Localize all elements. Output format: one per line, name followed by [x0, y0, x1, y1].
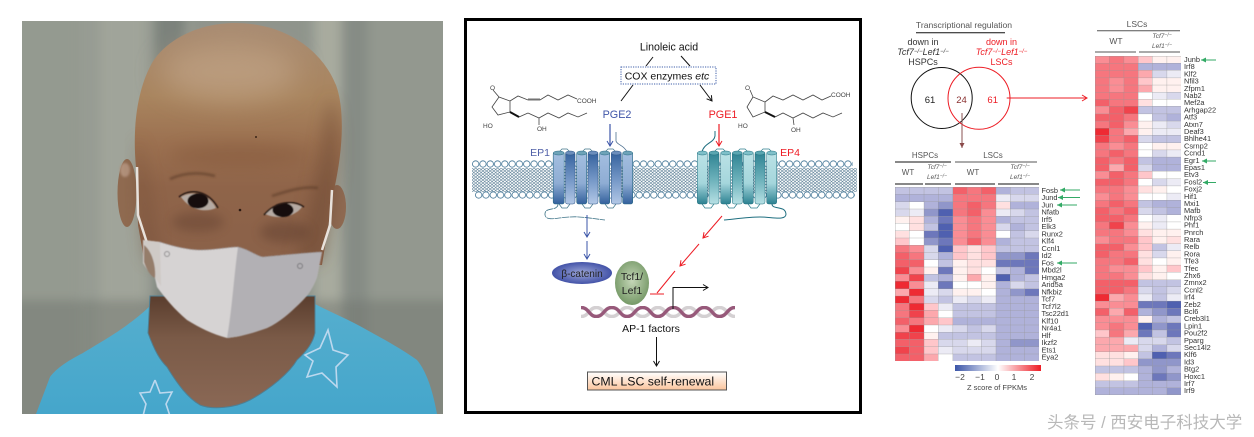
heatmap 2 gene labels: Ccnd1: [1184, 149, 1205, 158]
protein: Tcf1/Lef1: Lef1: [622, 285, 642, 297]
label: AP-1 factors: AP-1 factors: [622, 323, 680, 335]
heatmap 2 gene labels: Atxn7: [1184, 120, 1203, 129]
label: PGE2: PGE2: [603, 109, 631, 121]
heatmap 2 gene labels: Tfe3: [1184, 257, 1199, 266]
heatmap 2 gene labels: Etv3: [1184, 170, 1199, 179]
heatmap 2 gene labels: Nfil3: [1184, 77, 1199, 86]
venn diagram: [911, 67, 1010, 129]
heatmap 2 gene labels: Epas1: [1184, 163, 1205, 172]
arrow: PGE2 to EP1: [609, 124, 611, 146]
label: down in HSPCs: [897, 37, 949, 67]
heatmap 1 headers: −/−: [1023, 174, 1030, 180]
arrow: venn to shared heatmap: [961, 113, 963, 148]
heatmap 2 gene labels: Zhx6: [1184, 271, 1200, 280]
heatmap 1 gene labels: Runx2: [1042, 230, 1063, 238]
heatmap 2 gene labels: Egr1: [1184, 156, 1200, 165]
heatmap 2 gene labels: Hoxc1: [1184, 372, 1205, 381]
colour scale legend: 1: [1012, 372, 1017, 382]
heatmap 2 gene labels: Sec14l2: [1184, 343, 1211, 352]
heatmap 2: genes down in LSCs: [1095, 56, 1181, 395]
label: EP4: EP4: [780, 147, 800, 159]
protein: beta-catenin: [552, 262, 612, 284]
heatmap 1 gene labels: Tcf7l2: [1042, 302, 1061, 311]
heatmap 2 gene labels: Pparg: [1184, 336, 1204, 345]
venn diagram: 61: [925, 95, 935, 106]
heatmap 2 gene labels: Zmnx2: [1184, 278, 1207, 287]
heatmap 1 gene labels: Fosb: [1042, 186, 1058, 195]
heatmap 1 headers: Tcf7: [1010, 164, 1022, 171]
face mask: [143, 240, 322, 338]
eyebrows: [170, 173, 318, 196]
heatmap 1 headers: Lef1: [1010, 174, 1023, 181]
heatmap 1 headers: LSCs: [983, 151, 1003, 160]
heatmap 1 headers: Tcf7: [927, 164, 939, 171]
green arrows: heatmap 1 highlighted genes: [1057, 190, 1080, 263]
heatmap 2 gene labels: Rora: [1184, 249, 1201, 258]
label: down in HSPCs: −/−: [940, 49, 949, 55]
colour scale legend: −2: [955, 372, 965, 382]
chemical structure: PGE2: COOH: [577, 98, 597, 105]
heatmap 1 gene labels: Nr4a1: [1042, 324, 1062, 333]
arrows: to PGE2 and PGE1: [621, 85, 712, 101]
heatmap 1 headers: −/−: [939, 164, 947, 170]
chemical structure: PGE1: OH: [791, 127, 801, 134]
arrow: venn to LSC heatmap: [1007, 97, 1087, 99]
heatmap 2 headers: LSCs: [1127, 19, 1147, 29]
chemical structure: PGE1: COOH: [831, 92, 851, 99]
colour scale legend: 0: [995, 372, 1000, 382]
heatmap 2 gene labels: Irf7: [1184, 379, 1195, 388]
heatmap 2 gene labels: Deaf3: [1184, 127, 1204, 136]
heatmap 2 gene labels: Pnrch: [1184, 228, 1203, 237]
heatmap 1: shared genes in HSPCs and LSCs: [895, 187, 1039, 361]
heatmap 1 gene labels: Ikzf2: [1042, 338, 1057, 347]
cell membrane: [472, 160, 857, 199]
heatmap 1 headers: Lef1: [927, 174, 940, 181]
head: [135, 23, 342, 265]
arrows: EP1 to beta-catenin: [586, 215, 588, 259]
panel frame: [466, 20, 860, 412]
heatmap 1 headers: WT: [967, 168, 979, 177]
heatmap 2 gene labels: Creb3l1: [1184, 314, 1210, 323]
heatmap 2 gene labels: Bhlhe41: [1184, 134, 1211, 143]
heatmap 1 gene labels: Mbd2l: [1042, 266, 1062, 275]
heatmap 2 gene labels: Fosl2: [1184, 177, 1202, 186]
left eye: [179, 192, 218, 210]
heatmap 1 gene labels: Tsc22d1: [1042, 309, 1069, 318]
protein: beta-catenin: β-catenin: [561, 269, 603, 280]
photo background: corrugated wall: [22, 21, 443, 414]
box: CML LSC self-renewal: [588, 372, 726, 390]
heatmap 1 gene labels: Elk3: [1042, 222, 1056, 231]
label: down in HSPCs: down in: [907, 37, 939, 47]
heatmap 2 gene labels: Mef2a: [1184, 98, 1205, 107]
chemical structure: PGE2: O: [490, 85, 495, 92]
heatmap 2 headers: Tcf7: [1152, 33, 1164, 40]
receptor: EP1: [545, 132, 633, 220]
heatmap 1 headers: WT: [902, 168, 914, 177]
label: down in HSPCs: Lef1: [923, 47, 940, 57]
chemical structure: PGE1: O: [745, 85, 750, 92]
heatmap 1 gene labels: Jun: [1042, 200, 1053, 210]
chemical structure: PGE1: [738, 85, 851, 134]
heatmap 2 gene labels: Nfrp3: [1184, 213, 1202, 222]
box: COX enzymes: COX enzymes etc: [625, 70, 710, 82]
heatmap 2 gene labels: Phf1: [1184, 221, 1199, 230]
heatmap 2 headers: −/−: [1164, 32, 1172, 38]
heading: Transcriptional regulation: Transcriptional regulation: [916, 20, 1012, 30]
mask straps: [137, 167, 332, 250]
heatmap 1 gene labels: Eya2: [1042, 353, 1058, 362]
heatmap 2 gene labels: Irf8: [1184, 62, 1195, 71]
heatmap 1 gene labels: Nfatb: [1042, 208, 1059, 217]
heatmap 1 gene labels: Irf5: [1042, 215, 1052, 224]
label: down in HSPCs: −/−: [914, 49, 923, 55]
heatmap 2 gene labels: Id3: [1184, 357, 1194, 366]
heatmap 2 gene labels: Arhgap22: [1184, 105, 1216, 114]
heatmap 2 gene labels: Nab2: [1184, 91, 1202, 100]
heatmap 2 headers: −/−: [1165, 42, 1172, 48]
colour scale legend: −1: [975, 372, 985, 382]
protein: Tcf1/Lef1: [615, 261, 649, 305]
arrows: from linoleic acid: [646, 56, 690, 66]
chemical structure: PGE2: [483, 85, 597, 133]
heatmap 2 gene labels: Irf9: [1184, 386, 1195, 395]
heatmap 2 gene labels: Foxj2: [1184, 185, 1202, 194]
heatmap 1 gene labels: Jund: [1042, 193, 1058, 202]
heatmap 2 gene labels: Pou2f2: [1184, 329, 1207, 338]
heatmap 1 gene labels: Fos: [1042, 258, 1054, 268]
label: down in LSCs: −/−: [992, 49, 1002, 55]
heatmap 1 gene labels: Nfkbiz: [1042, 288, 1062, 296]
heatmap 2 gene labels: [1184, 55, 1216, 395]
heatmap 2 headers: Lef1: [1152, 43, 1165, 50]
chemical structure: PGE2: HO: [483, 123, 493, 130]
arrow: transcription start: [673, 288, 708, 309]
heatmap 1 gene labels: Ccnl1: [1042, 244, 1060, 253]
heatmap 2 gene labels: Hif1: [1184, 192, 1197, 201]
colour scale legend: 2: [1030, 372, 1035, 382]
protein: Tcf1/Lef1: Tcf1/: [621, 271, 643, 283]
label: PGE1: PGE1: [709, 109, 737, 121]
label: down in LSCs: Tcf7: [976, 47, 992, 57]
heatmap 1 headers: −/−: [940, 174, 947, 180]
heatmap 2 gene labels: Mxi1: [1184, 199, 1200, 208]
venn diagram: 61: [987, 95, 998, 106]
label: EP1: EP1: [530, 147, 550, 159]
heatmap 2 gene labels: Btg2: [1184, 365, 1199, 374]
heatmap 2 gene labels: Lpin1: [1184, 321, 1202, 330]
heatmap 2 gene labels: Mafb: [1184, 206, 1200, 215]
under-eye shadows: [172, 212, 224, 232]
colour scale legend: Z score of FPKMs: [967, 383, 1027, 392]
heatmap 2 gene labels: Irf4: [1184, 293, 1195, 302]
shirt: [36, 304, 437, 416]
chemical structure: PGE2: OH: [537, 126, 547, 133]
chemical structure: PGE1: HO: [738, 123, 748, 130]
heatmap 1 gene labels: [1042, 186, 1069, 362]
heatmap 1 gene labels: Klf4: [1042, 237, 1054, 246]
neck: [148, 296, 315, 408]
heatmap 2 gene labels: Csrnp2: [1184, 141, 1208, 150]
watermark: 头条号 / 西安电子科技大学: [1047, 413, 1242, 432]
colour scale legend: [955, 365, 1041, 392]
label: down in LSCs: −/−: [1019, 49, 1028, 55]
heatmap 2 gene labels: Tfec: [1184, 264, 1199, 273]
label: down in LSCs: Lef1: [1001, 47, 1019, 57]
DNA helix: [581, 306, 735, 318]
heatmap 2 gene labels: Klf6: [1184, 350, 1197, 359]
heatmap 2 gene labels: Junb: [1184, 55, 1200, 64]
heatmap 1 gene labels: Arid5a: [1042, 280, 1064, 289]
heatmap 1 headers: HSPCs: [912, 151, 938, 160]
label: down in LSCs: down in: [986, 37, 1017, 47]
heatmap 1 gene labels: Id2: [1042, 251, 1052, 260]
arrow: AP-1 to self-renewal: [656, 337, 658, 366]
heatmap 1 headers: −/−: [1022, 164, 1030, 170]
receptor: EP4: [697, 131, 786, 220]
heatmap 2 gene labels: Atf3: [1184, 113, 1197, 122]
heatmap 1 headers: [895, 151, 1039, 184]
arrows: EP4 to inhibition of Tcf1/Lef1: [650, 216, 722, 294]
heatmap 2 gene labels: Ccnl2: [1184, 285, 1203, 294]
label: down in LSCs: LSCs: [990, 57, 1013, 67]
box: CML LSC self-renewal: CML LSC self-renewal: [592, 374, 714, 388]
label: Linoleic acid: Linoleic acid: [640, 42, 698, 54]
heatmap 1 gene labels: Klf10: [1042, 316, 1058, 326]
photo: child with mask: [22, 21, 443, 414]
heatmap 1 gene labels: Hmga2: [1042, 273, 1065, 282]
ears: [118, 159, 346, 229]
label: down in HSPCs: Tcf7: [897, 47, 914, 57]
heatmap 2 headers: WT: [1109, 36, 1123, 46]
right eye: [264, 203, 304, 217]
venn diagram: 24: [956, 95, 967, 106]
heatmap 1 gene labels: Ets1: [1042, 346, 1056, 354]
arrow: PGE1 to EP4: [718, 124, 720, 146]
heatmap 2 gene labels: Relb: [1184, 242, 1199, 251]
heatmap 2 gene labels: Zeb2: [1184, 300, 1201, 309]
heatmap 2 gene labels: Rara: [1184, 235, 1201, 244]
label: down in HSPCs: HSPCs: [908, 57, 938, 67]
heatmap 2 gene labels: Klf2: [1184, 69, 1197, 78]
heatmap 2 headers: [1095, 19, 1180, 52]
heatmap 1 gene labels: Hlf: [1042, 331, 1051, 340]
green arrows: heatmap 2 highlighted genes: [1201, 60, 1216, 182]
heatmap 2 gene labels: Zfpm1: [1184, 84, 1205, 93]
heatmap 2 gene labels: Bcl6: [1184, 307, 1198, 316]
box: COX enzymes: [621, 67, 716, 84]
label: down in LSCs: [976, 37, 1028, 67]
heatmap 1 gene labels: Tcf7: [1042, 295, 1055, 304]
